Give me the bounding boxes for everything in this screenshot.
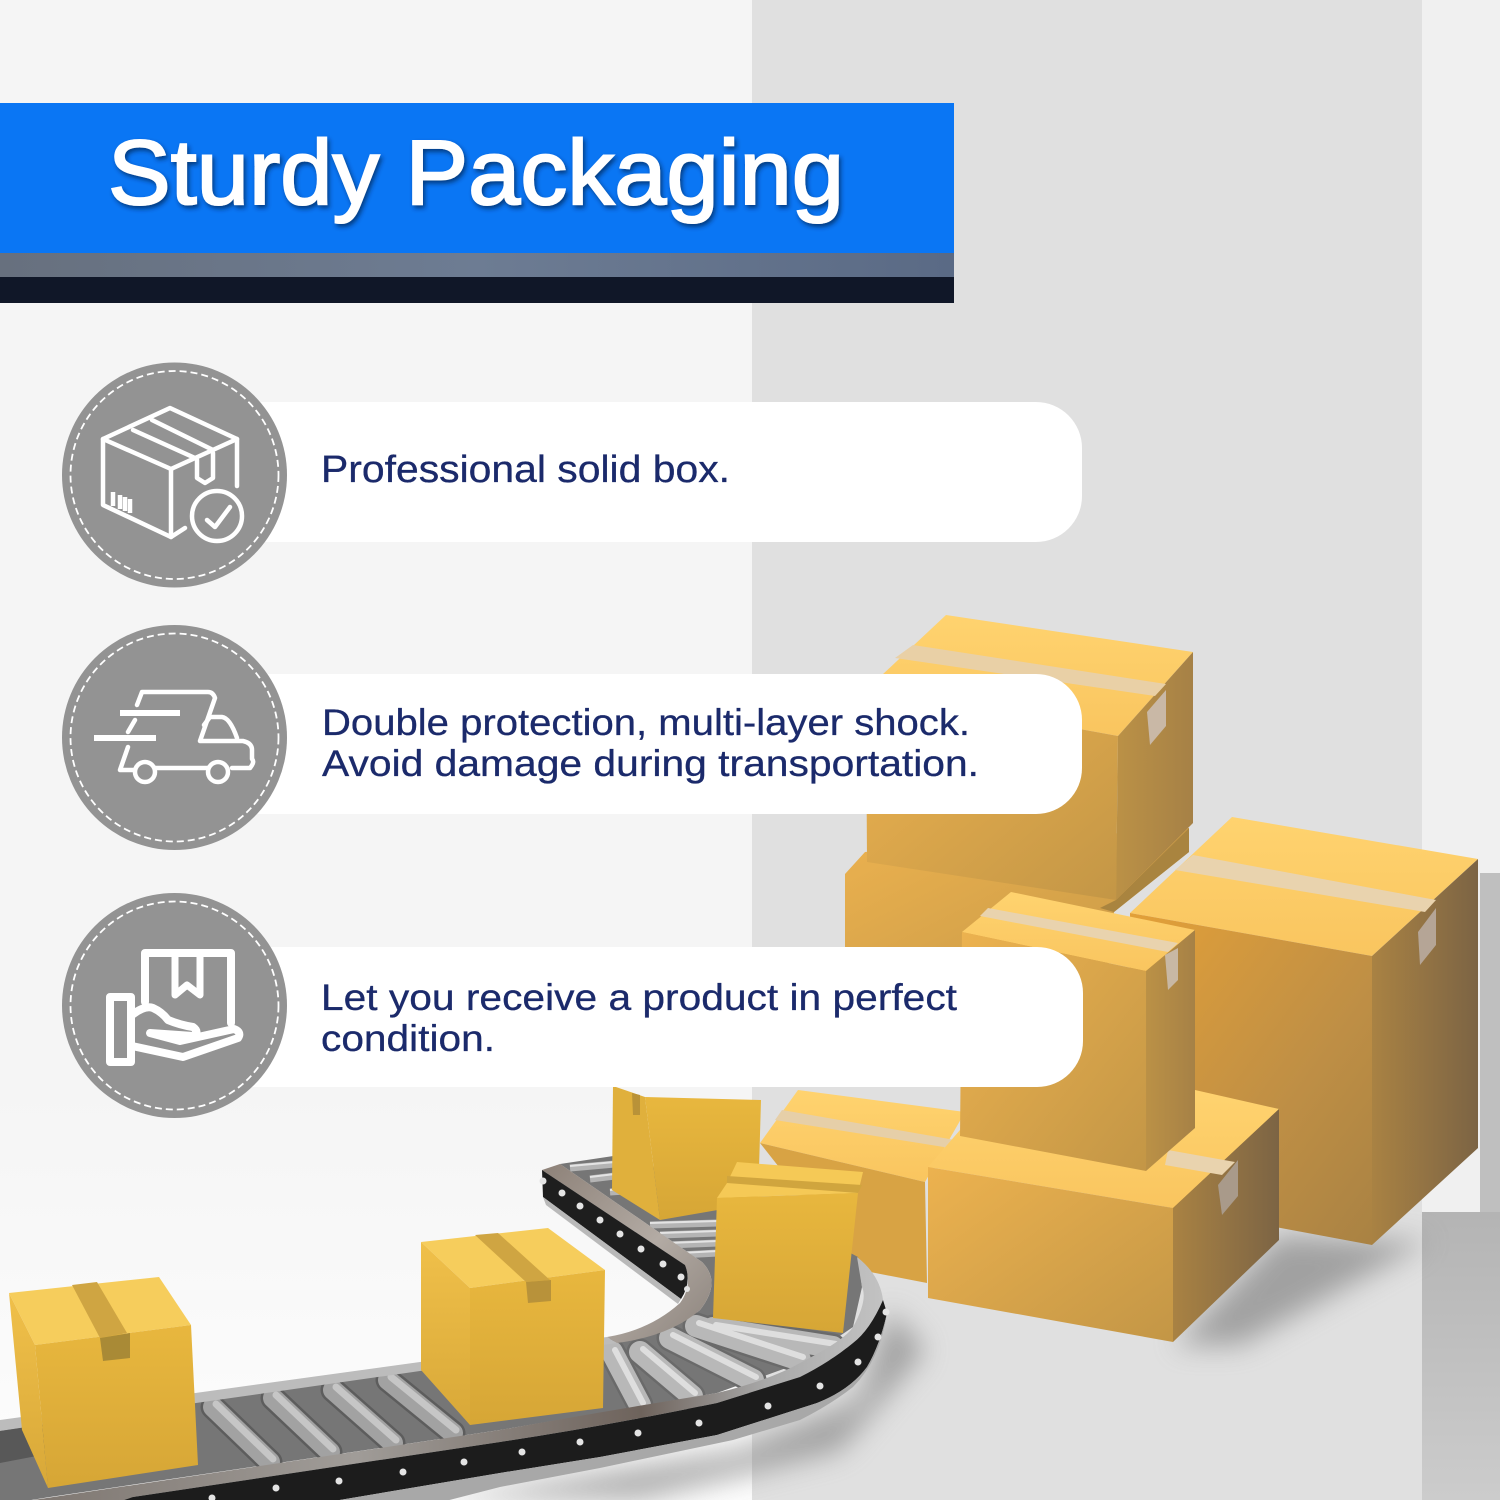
- box: large right: [1130, 817, 1478, 1245]
- icon: hand holding package: [110, 953, 239, 1062]
- text 3: [321, 977, 958, 1059]
- front rail metal top: [0, 1257, 883, 1500]
- pill 1: [200, 402, 1082, 542]
- title: Sturdy Packaging: [108, 122, 844, 224]
- conveyor box 4: [713, 1162, 863, 1333]
- text 3: condition.: [321, 1018, 495, 1059]
- inner band lower lip: [543, 1197, 681, 1304]
- inner curve metal: [542, 1164, 712, 1343]
- text 2: [322, 702, 979, 784]
- back rail strip: [0, 1337, 617, 1431]
- title banner: [0, 103, 954, 303]
- badge 1 stitching: [70, 371, 278, 579]
- box: second tier back: [845, 828, 1189, 1000]
- pill 3: [200, 947, 1083, 1087]
- box: lower front: [928, 1090, 1279, 1342]
- straight rollers: [213, 1377, 456, 1462]
- stacked cardboard boxes: [760, 615, 1478, 1342]
- badge 1: [62, 362, 287, 588]
- curved rollers: [612, 1323, 836, 1405]
- conveyor bed: [0, 1155, 862, 1500]
- roller conveyor: [0, 1086, 890, 1500]
- text 1: Professional solid box.: [321, 449, 730, 491]
- text 2: Avoid damage during transportation.: [322, 743, 979, 784]
- icon: delivery truck: [94, 692, 253, 782]
- conveyor box 1: [9, 1277, 198, 1488]
- box: middle: [960, 892, 1195, 1171]
- badge 3: [62, 893, 287, 1118]
- floor shadows: [430, 1235, 1430, 1500]
- text 3: Let you receive a product in perfect: [321, 977, 958, 1018]
- feature row 2: [62, 625, 1082, 850]
- badge 3 stitching: [70, 902, 278, 1110]
- feature row 1: [62, 362, 1082, 588]
- front rail black band: [110, 1300, 887, 1500]
- rivets: [208, 1178, 890, 1500]
- pill 2: [200, 674, 1082, 814]
- box: top: [866, 615, 1193, 900]
- back rail left end: [0, 1422, 68, 1463]
- icon: box with check: [103, 408, 242, 541]
- badge 2: [62, 625, 287, 850]
- front rail lower lip: [310, 1313, 887, 1500]
- feature row 3: [62, 893, 1083, 1118]
- inner curve black band: [542, 1170, 688, 1299]
- box: lower left: [760, 1090, 965, 1283]
- far rollers: [570, 1162, 718, 1255]
- text 2: Double protection, multi-layer shock.: [322, 702, 970, 743]
- badge 2 stitching: [70, 634, 278, 842]
- conveyor box 2: [421, 1228, 605, 1425]
- conveyor box 3: [612, 1086, 761, 1220]
